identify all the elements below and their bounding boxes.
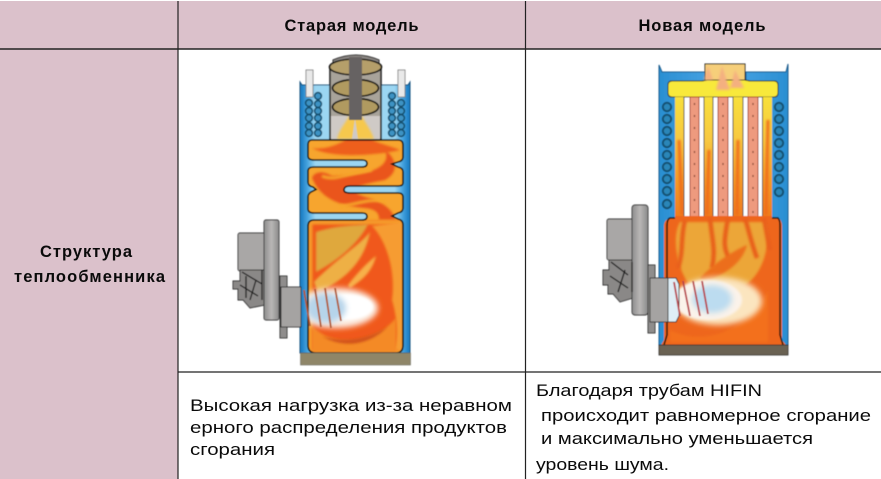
description: old model: сгорания	[190, 440, 275, 459]
description: old model: ерного распределения продуктов	[190, 418, 507, 437]
burner coil	[304, 288, 341, 328]
row label: теплообменника	[14, 268, 166, 286]
water jacket	[659, 64, 788, 345]
hatched base	[659, 345, 788, 355]
flue neck	[702, 64, 748, 97]
coils	[306, 93, 404, 136]
water pipes	[306, 70, 405, 97]
description: old model	[190, 396, 512, 459]
flame swirls	[308, 140, 402, 352]
row label: Структура	[40, 243, 133, 261]
HIFIN tubes	[690, 97, 758, 217]
heading: old model: Старая модель	[284, 17, 418, 35]
burner	[233, 220, 301, 338]
diagram: new heat exchanger	[603, 64, 788, 355]
yellow header chamber	[668, 80, 778, 97]
coils	[663, 103, 783, 208]
diagram: old heat exchanger	[233, 55, 410, 365]
water jacket	[300, 82, 410, 353]
furnace	[661, 216, 786, 345]
description: new model: Благодаря трубам HIFIN	[536, 381, 762, 400]
chimney	[330, 67, 381, 139]
fire tube bank	[675, 97, 772, 219]
description: new model: происходит равномерное сгорание	[541, 406, 871, 425]
burner	[603, 205, 679, 333]
description: new model	[536, 381, 871, 474]
row label	[14, 243, 166, 286]
description: new model: уровень шума.	[536, 455, 669, 474]
row label column	[0, 49, 178, 479]
flame channel	[308, 140, 403, 353]
description: new model: и максимально уменьшается	[541, 429, 813, 448]
heading: new model: Новая модель	[638, 17, 766, 35]
description: old model: Высокая нагрузка из-за неравном	[190, 396, 512, 415]
header band	[0, 1, 881, 49]
white slits	[684, 97, 762, 217]
burner coil	[674, 281, 708, 316]
base	[300, 353, 410, 365]
